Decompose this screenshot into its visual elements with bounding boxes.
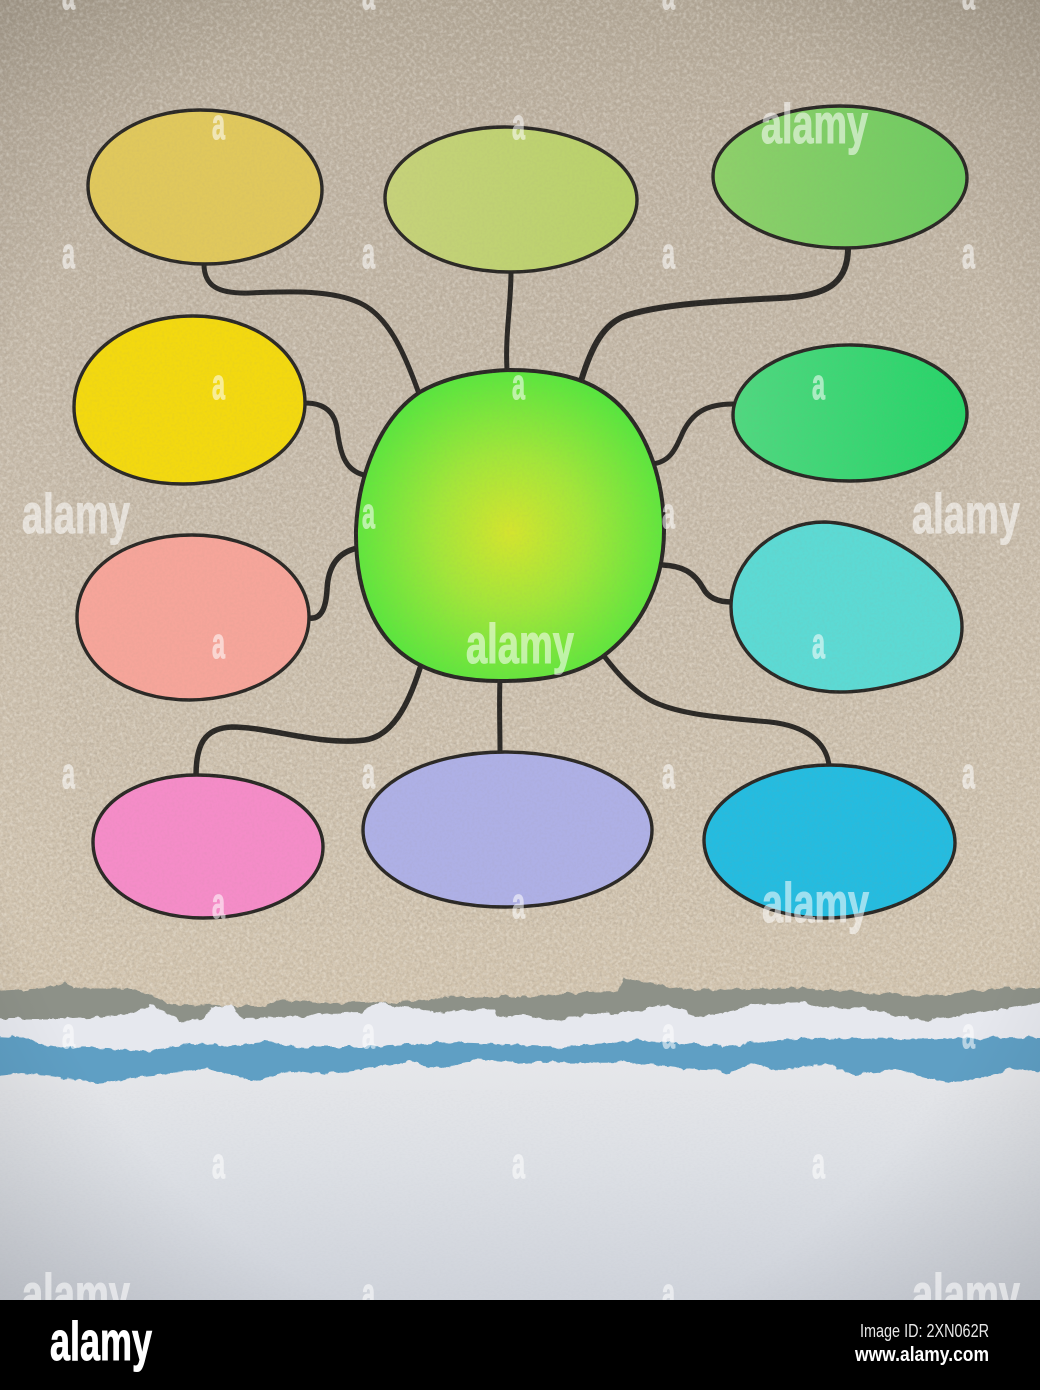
- alamy watermarks: alamy: [466, 612, 574, 675]
- alamy watermarks: a: [662, 229, 675, 278]
- alamy watermarks: alamy: [22, 482, 130, 545]
- background: kraft paper: [0, 0, 1040, 1010]
- website: www.alamy.com: [854, 1344, 989, 1366]
- alamy watermarks: a: [362, 1009, 375, 1058]
- connector lines: [196, 248, 848, 776]
- alamy watermarks: a: [62, 1009, 75, 1058]
- connector: pink to center: [196, 668, 420, 776]
- connector: lavender to center: [497, 678, 502, 752]
- bubble: salmon: [77, 535, 309, 700]
- bubble: center: [356, 370, 664, 681]
- alamy watermarks: a: [962, 1009, 975, 1058]
- torn paper layers: [0, 977, 1040, 1320]
- bubble: yellow: [74, 316, 305, 484]
- bubble: pink: [93, 775, 323, 918]
- connector: green to center: [581, 248, 848, 381]
- footer bar: [0, 1300, 1040, 1390]
- alamy watermarks: a: [662, 489, 675, 538]
- bubble: turquoise: [731, 522, 962, 692]
- alamy watermarks: a: [662, 1269, 675, 1318]
- bubble: olive: [385, 127, 637, 272]
- alamy watermarks: alamy: [22, 1262, 130, 1325]
- mind map bubbles: [74, 106, 967, 918]
- bubble: ochre: [88, 110, 322, 264]
- alamy watermarks: a: [662, 749, 675, 798]
- alamy watermarks: a: [362, 489, 375, 538]
- alamy watermarks: a: [512, 1139, 525, 1188]
- bubble: green: [713, 106, 967, 248]
- alamy watermarks: a: [512, 879, 525, 928]
- alamy watermarks: a: [362, 1269, 375, 1318]
- bubble: lavender: [363, 752, 652, 907]
- connector: turquoise to center: [663, 565, 732, 602]
- connector: blue to center: [604, 656, 829, 765]
- alamy watermarks: a: [512, 100, 525, 149]
- white paper texture: [0, 1090, 1040, 1300]
- alamy watermarks: a: [662, 1009, 675, 1058]
- alamy watermarks: a: [512, 360, 525, 409]
- footer logo: alamy: [50, 1310, 152, 1372]
- alamy watermarks: a: [362, 229, 375, 278]
- alamy watermarks: alamy: [762, 871, 869, 934]
- bubble: blue: [704, 765, 955, 918]
- alamy watermarks: a: [362, 749, 375, 798]
- alamy watermarks: a: [962, 229, 975, 278]
- alamy watermarks: a: [212, 1139, 225, 1188]
- alamy watermarks: a: [212, 100, 225, 149]
- alamy watermarks: a: [212, 879, 225, 928]
- alamy watermarks: a: [62, 749, 75, 798]
- image id: Image ID: 2XN062R: [860, 1321, 989, 1341]
- bubble: emerald: [733, 345, 967, 481]
- connector: emerald to center: [652, 404, 733, 464]
- connector: ochre to center: [204, 264, 418, 391]
- torn blue layer: [0, 1035, 1040, 1100]
- torn white layer: [0, 1002, 1040, 1070]
- connector: yellow to center: [305, 403, 364, 475]
- alamy watermarks: alamy: [761, 92, 868, 155]
- alamy watermarks: a: [812, 619, 825, 668]
- alamy watermarks: a: [62, 229, 75, 278]
- alamy watermarks: a: [812, 1139, 825, 1188]
- torn bottom white sheet: [0, 1059, 1040, 1320]
- alamy watermarks: a: [212, 619, 225, 668]
- connector: salmon to center: [309, 548, 358, 618]
- alamy watermarks: a: [812, 360, 825, 409]
- paper grain over bubbles: [60, 95, 980, 925]
- torn grey layer: [0, 977, 1040, 1050]
- connector: olive to center: [507, 272, 511, 370]
- alamy watermarks: a: [962, 749, 975, 798]
- alamy watermarks: a: [212, 360, 225, 409]
